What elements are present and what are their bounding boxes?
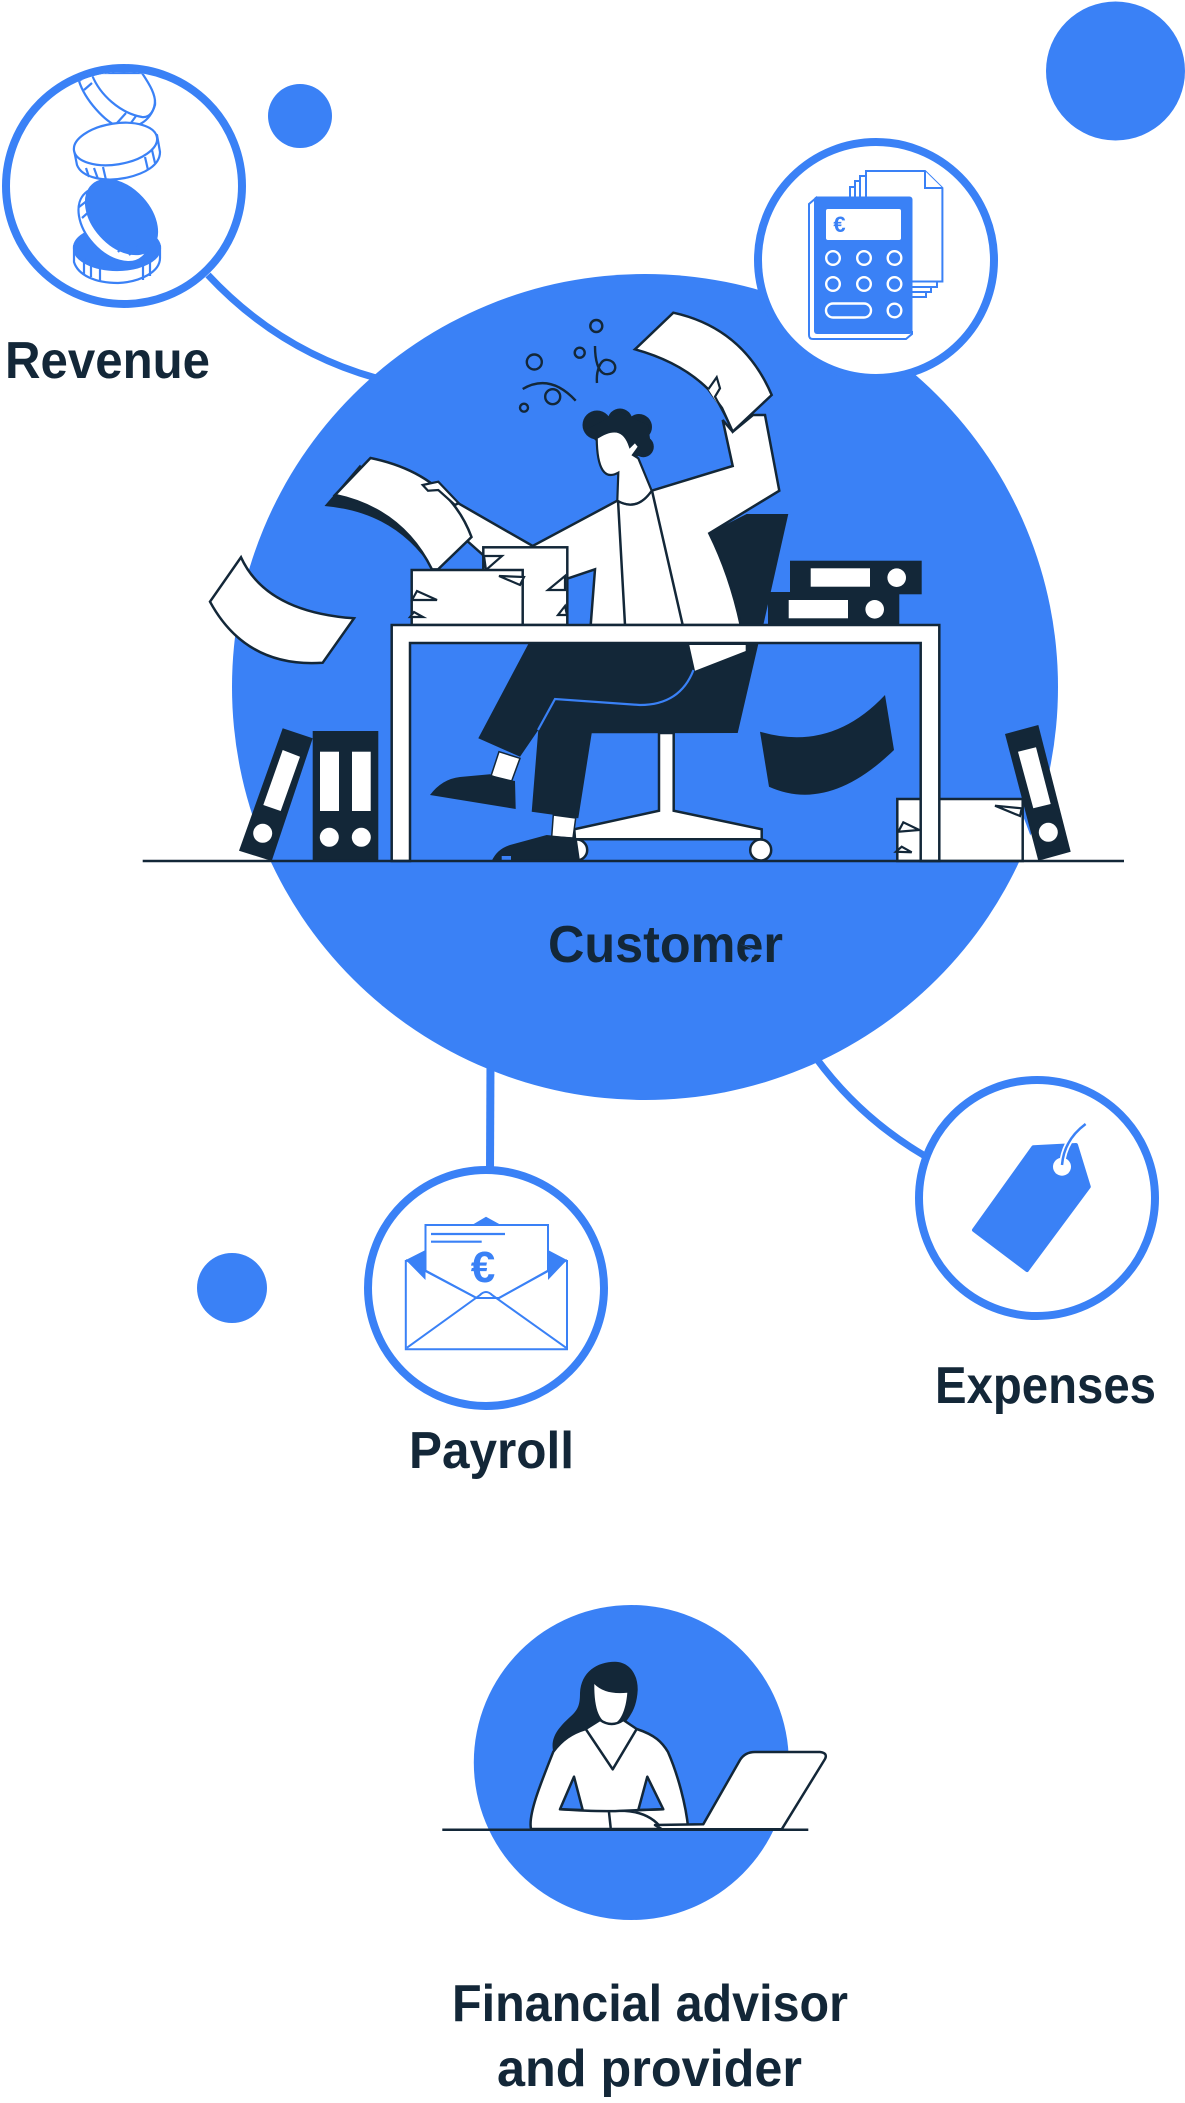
label: Financial advisor and provider xyxy=(452,1975,848,2098)
hair xyxy=(553,1662,638,1752)
binder: leaning left xyxy=(239,728,313,861)
letter xyxy=(426,1225,548,1298)
office chair back xyxy=(705,514,788,625)
man: torso and arms xyxy=(445,415,779,625)
face xyxy=(594,1684,627,1724)
label: Financial advisor and provider: Financial advisor xyxy=(452,1975,848,2033)
calculator xyxy=(809,198,912,339)
illustration: financial advisor at laptop xyxy=(442,1662,826,1830)
decorative dot: top left xyxy=(268,84,332,148)
envelope xyxy=(406,1260,567,1349)
gaps between arms and torso xyxy=(560,1777,663,1810)
icon: calculator and documents in circle xyxy=(758,142,994,378)
floor line xyxy=(143,860,1124,862)
label: Customer: Customer xyxy=(548,916,783,974)
stress doodles above head xyxy=(520,320,615,412)
label: Revenue: Revenue xyxy=(5,332,210,390)
stack of papers: front xyxy=(410,570,524,625)
forearm lines xyxy=(560,1809,663,1829)
body xyxy=(531,1720,688,1829)
price tag xyxy=(974,1145,1089,1270)
documents xyxy=(850,171,942,297)
label: Financial advisor and provider: and provider xyxy=(497,2040,802,2098)
connector: revenue to customer xyxy=(208,275,376,378)
icon: expenses price tag in circle xyxy=(919,1080,1155,1316)
paper held in right hand xyxy=(635,313,772,432)
paper held in left hand with shadow xyxy=(324,458,472,569)
connector: expenses to customer xyxy=(816,1058,925,1156)
binders: upright pair xyxy=(313,731,378,861)
euro symbol on screen: € xyxy=(833,212,846,237)
binders stacked on desk xyxy=(768,561,922,625)
euro symbol on letter: € xyxy=(471,1243,495,1292)
envelope back flaps xyxy=(406,1217,567,1280)
desk line xyxy=(442,1828,808,1831)
illustration: customer overwhelmed at desk xyxy=(143,313,1124,861)
tag hole and string xyxy=(1053,1124,1086,1176)
neckline xyxy=(586,1729,637,1769)
box of papers: right floor xyxy=(896,799,1040,861)
decorative dot: lower left xyxy=(197,1253,267,1323)
label: Payroll: Payroll xyxy=(409,1422,574,1480)
man: socks and shoes xyxy=(430,752,580,861)
binder: leaning right xyxy=(1005,725,1071,861)
connector: payroll to customer xyxy=(486,1060,494,1170)
floating dark paper xyxy=(760,695,894,795)
floating paper: far left xyxy=(210,557,354,663)
label: Expenses: Expenses xyxy=(935,1357,1156,1415)
stack of papers: back xyxy=(483,547,567,625)
letter text lines xyxy=(431,1234,505,1242)
man: head and hair xyxy=(582,408,654,505)
laptop xyxy=(655,1752,826,1829)
circle: financial advisor xyxy=(474,1605,789,1920)
man: trousers and seat xyxy=(478,644,758,818)
icon: payroll envelope in circle xyxy=(368,1170,604,1406)
main customer circle xyxy=(232,274,1058,1100)
chair stem and base xyxy=(566,733,771,860)
decorative dot: top right xyxy=(1046,2,1185,140)
calculator buttons xyxy=(826,251,901,318)
coins stack xyxy=(72,72,162,284)
desk xyxy=(392,625,939,861)
icon: revenue coins in circle xyxy=(6,68,242,304)
